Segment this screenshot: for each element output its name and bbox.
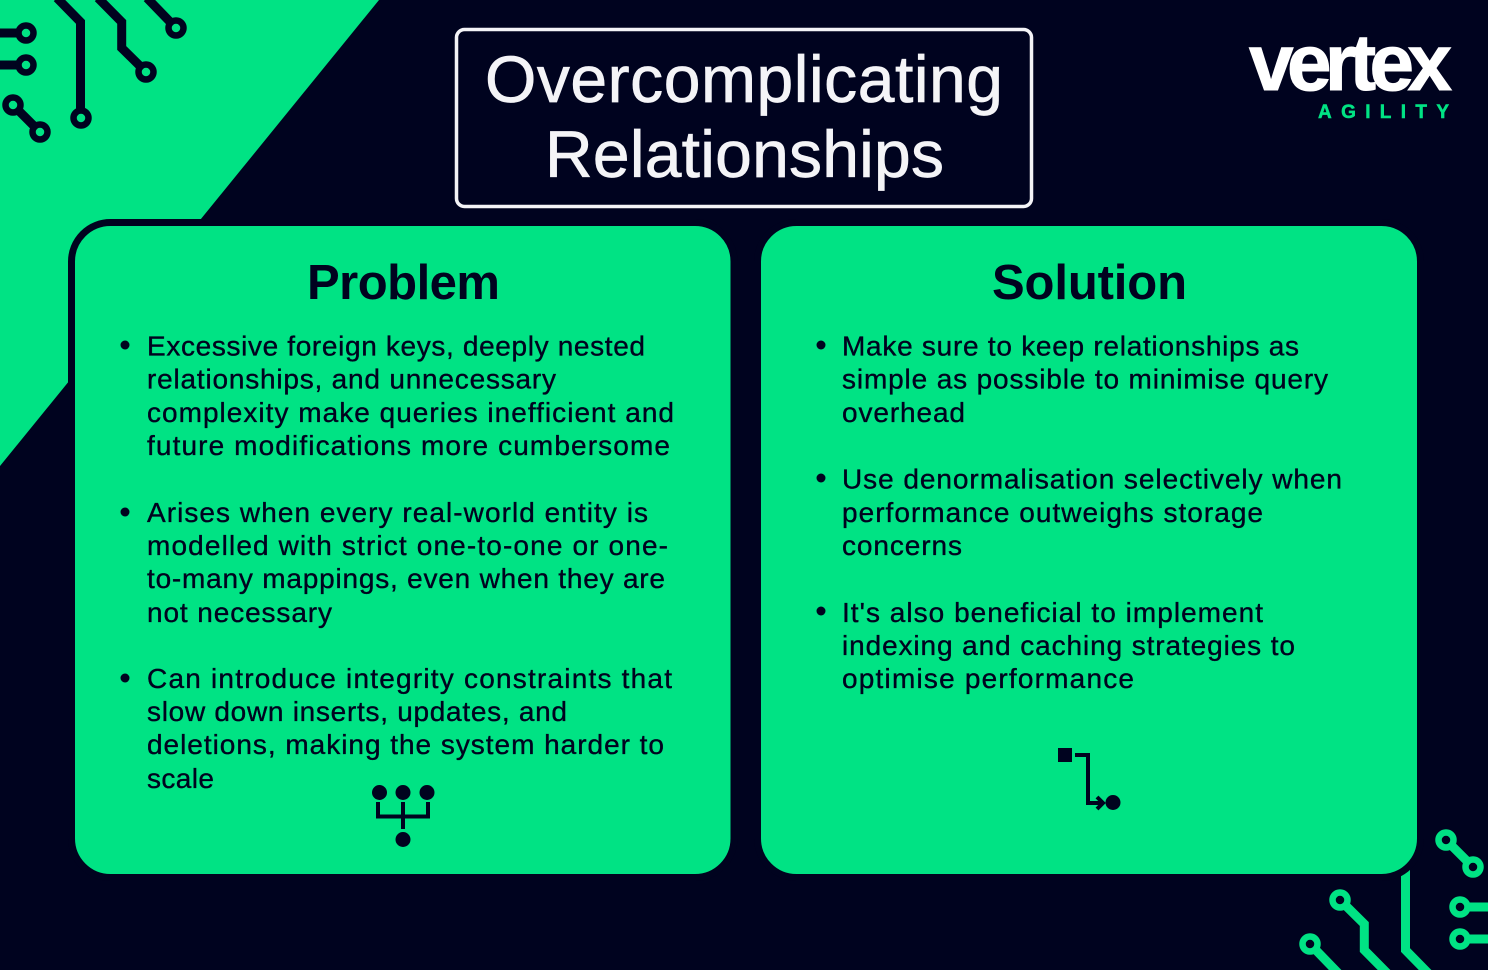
text: problem bullets: Can introduce integrity constraints that bbox=[147, 663, 672, 694]
text: solution bullets: Use denormalisation selectively when bbox=[842, 464, 1342, 494]
logo: vertex agility: vertex bbox=[1249, 18, 1452, 107]
text: problem bullets: slow down inserts, updates, and bbox=[147, 696, 567, 727]
text: solution bullets: indexing and caching strategies to bbox=[842, 630, 1295, 661]
title: Overcomplicating bbox=[485, 42, 1003, 116]
text: problem bullets: modelled with strict one-to-one or one- bbox=[147, 530, 668, 561]
icon: flow arrow bbox=[1058, 748, 1120, 810]
text: problem bullets: Arises when every real-world entity is bbox=[147, 497, 648, 528]
circuit decoration: bottom right bbox=[1302, 832, 1488, 970]
text: solution bullets: concerns bbox=[842, 530, 962, 561]
heading: problem: Problem bbox=[307, 256, 500, 310]
circuit decoration: top left bbox=[0, 0, 184, 140]
text: problem bullets: scale bbox=[147, 763, 214, 794]
text: solution bullets bbox=[816, 330, 1342, 694]
logo: vertex agility: AGILITY bbox=[1318, 102, 1449, 123]
text: solution bullets: Make sure to keep relationships as bbox=[842, 330, 1299, 362]
text: problem bullets: Excessive foreign keys, deeply nested bbox=[147, 330, 645, 362]
text: solution bullets: overhead bbox=[842, 397, 965, 428]
heading: solution: Solution bbox=[992, 256, 1187, 310]
text: problem bullets bbox=[120, 330, 674, 794]
text: problem bullets: not necessary bbox=[147, 597, 332, 628]
text: solution bullets: optimise performance bbox=[842, 663, 1134, 694]
text: solution bullets: simple as possible to minimise query bbox=[842, 364, 1328, 394]
text: problem bullets: future modifications more cumbersome bbox=[147, 430, 670, 461]
title: Relationships bbox=[545, 117, 944, 191]
panel: solution bbox=[758, 222, 1420, 878]
icon: hierarchy tree bbox=[372, 785, 434, 847]
text: problem bullets: relationships, and unnecessary bbox=[147, 364, 556, 394]
text: problem bullets: deletions, making the system harder to bbox=[147, 729, 664, 760]
text: solution bullets: It's also beneficial to implement bbox=[842, 597, 1263, 628]
text: problem bullets: complexity make queries inefficient and bbox=[147, 397, 674, 428]
title bbox=[456, 30, 1032, 206]
panel: problem bbox=[72, 222, 734, 878]
text: problem bullets: to-many mappings, even when they are bbox=[147, 563, 665, 594]
green corner background bbox=[0, 0, 379, 466]
text: solution bullets: performance outweighs storage bbox=[842, 497, 1263, 528]
